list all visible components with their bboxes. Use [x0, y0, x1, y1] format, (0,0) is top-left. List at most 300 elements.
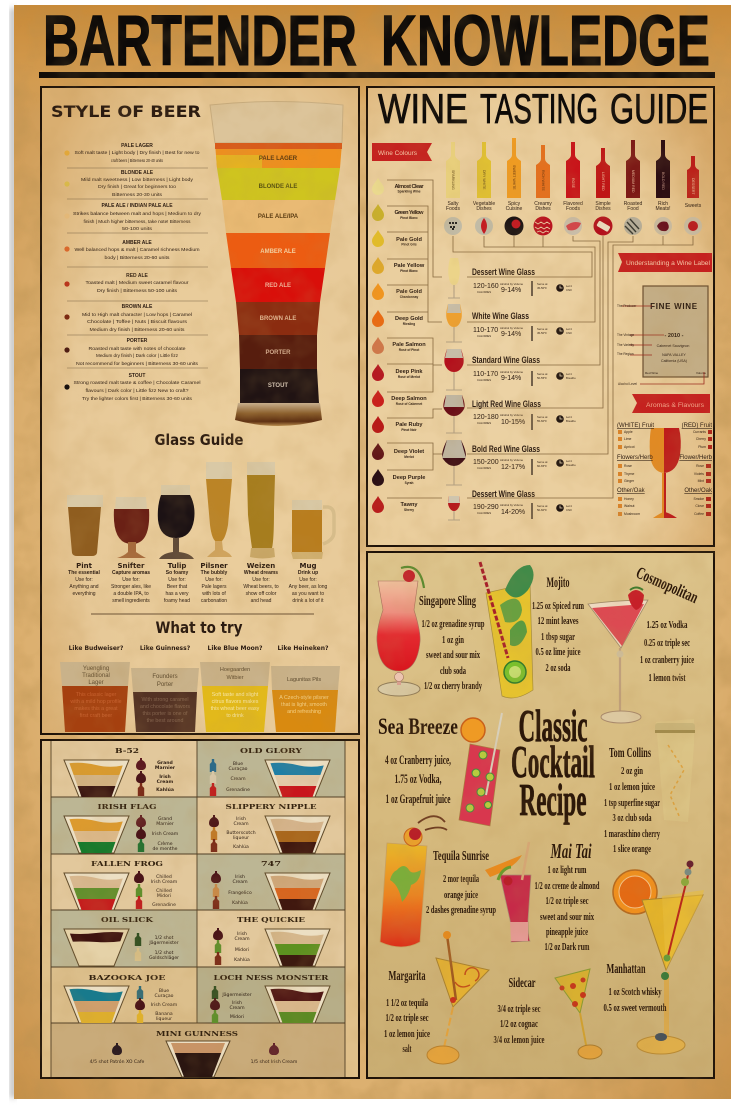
beer recommendation cups: Yuengling: [83, 666, 109, 672]
wine colour labels: Deep Gold: [395, 316, 424, 322]
glass guide captions: Any beer, as long: [289, 584, 328, 590]
wine label diagram: Cabernet Sauvignon: [657, 344, 689, 348]
glass specifications: Standard Wine Glass: [472, 355, 540, 365]
food pairing labels: Flavored: [563, 201, 583, 207]
glass specifications: Serve at: [537, 504, 548, 508]
shot: Irish Flag: Grand: [158, 816, 172, 822]
beer glass layer chart: RED ALE: [265, 283, 291, 289]
glass specifications: 12-17%: [501, 464, 525, 471]
what to try questions: Like Blue Moon?: [208, 645, 263, 652]
recipe: tom collins: 1 slice orange: [613, 843, 651, 855]
beer recommendation cups: first craft beer: [80, 713, 112, 719]
shot: Bazooka Joe: Irish Cream: [151, 1002, 178, 1008]
wine label diagram: - 2010 -: [665, 333, 684, 339]
recipe: mai tai: pineapple juice: [546, 926, 588, 938]
aroma lists: Mint: [698, 479, 704, 483]
glass guide captions: smell ingredients: [112, 598, 150, 604]
food pairing labels: Food: [627, 206, 639, 212]
glass specifications: Serve at: [537, 327, 548, 331]
food pairing labels: Spicy: [508, 201, 521, 207]
glass guide captions: Pint: [76, 562, 93, 570]
aroma lists: Lime: [624, 437, 631, 441]
glass specifications: Alcohol by Volume: [500, 458, 523, 462]
wine bottles: MEDIUM RED: [631, 170, 635, 193]
glass guide captions: The bubbly: [201, 570, 228, 576]
shot: Slippery Nipple: Kahlúa: [233, 843, 249, 850]
wine label diagram: FINE WINE: [650, 302, 698, 311]
beer style descriptions: AMBER ALE: [122, 240, 152, 246]
beer recommendation cups: with a mild hop profile: [70, 699, 122, 705]
aroma lists: Smoke: [693, 497, 704, 501]
food pairing labels: Simple: [595, 201, 611, 207]
connector lines: [387, 180, 693, 498]
glass specifications: Serve at: [537, 372, 548, 376]
food pairing labels: Creamy: [534, 201, 552, 207]
aroma lists: Thyme: [624, 472, 634, 476]
ribbon: wine colours: Wine Colours: [378, 150, 418, 157]
wine colour labels: Deep Violet: [394, 449, 424, 455]
heading: wine tasting guide: [378, 85, 708, 132]
glass specifications: 150-200: [473, 459, 499, 466]
beer style descriptions: Medium dry finish | Bitterness 20-60 units: [90, 327, 185, 333]
shot: B-52: Marnier: [155, 765, 176, 771]
shot: Loch Ness Monster: Jägermeister: [221, 992, 252, 998]
food pairing labels: Dishes: [535, 206, 551, 212]
glass specifications: Chill: [566, 508, 572, 512]
beer recommendation cups: that is light, smooth: [281, 702, 327, 708]
wine colour labels: Green Yellow: [394, 210, 424, 216]
aroma lists: Rose: [696, 464, 704, 468]
glass specifications: Breathe: [566, 419, 576, 423]
food pairing icons: [444, 216, 702, 236]
food pairing labels: [446, 201, 702, 212]
beer style descriptions: RED ALE: [126, 273, 149, 279]
shot: Oil Slick: Goldschläger: [149, 955, 179, 961]
wine label diagram: Red Wine: [645, 371, 659, 375]
wine colour labels: Pale Salmon: [392, 342, 426, 348]
glass specifications: Serve at: [537, 460, 548, 464]
what to try questions: Like Budweiser?: [69, 645, 124, 652]
shot: The Quickie: Cream: [234, 936, 250, 942]
beer style descriptions: Medium dry finish | Dark color | Little fizz: [96, 353, 179, 359]
illustration: singapore sling: [377, 567, 424, 696]
shot: B-52: Irish: [159, 774, 171, 780]
recipe: manhattan: [604, 962, 666, 1014]
recipe: sea breeze: [378, 714, 458, 806]
panel: style of beer and glass guide: [41, 87, 359, 734]
shot: Bazooka Joe: Banana: [155, 1011, 173, 1017]
wine glasses: [442, 258, 466, 520]
recipe: margarita: 1 1/2 oz tequila: [386, 997, 428, 1009]
glass guide captions: Anything and: [69, 584, 99, 590]
food pairing labels: Roasted: [624, 201, 643, 207]
shot: The Quickie: Kahlúa: [234, 956, 250, 963]
wine colour labels: Pinot Noir: [401, 428, 417, 432]
beer colour dots: [64, 150, 70, 390]
aroma lists: Honey: [624, 497, 634, 501]
illustration: umbrella drink: [485, 842, 531, 942]
recipe: manhattan: Manhattan: [606, 962, 646, 977]
wine bottles: DRY WHITE: [482, 170, 486, 190]
shot: The Quickie: [213, 916, 330, 966]
aroma lists: Rose: [624, 464, 632, 468]
wine label diagram: NAPA VALLEY: [662, 353, 686, 357]
recipe: singapore sling: 1 oz gin: [442, 634, 464, 646]
aroma lists: Violets: [694, 472, 704, 476]
recipe: cosmopolitan: 1 lemon twist: [648, 672, 686, 684]
recipe: cosmopolitan: 1 oz cranberry juice: [640, 654, 694, 666]
beer style descriptions: body | Bitterness 20-60 units: [104, 255, 170, 261]
beer recommendation cups: With strong caramel: [141, 697, 189, 703]
shot: Fallen Frog: Midori: [157, 893, 171, 899]
beer style descriptions: Mid to High malt character | Low hops | Caramel: [82, 312, 192, 318]
shot: B-52: B-52: [115, 747, 139, 755]
glass guide captions: Pale lagers: [201, 584, 227, 590]
illustration: sidecar: [555, 969, 602, 1059]
heading: wine tasting guide: TASTING: [480, 85, 598, 132]
recipe: sidecar: 3/4 oz lemon juice: [494, 1034, 545, 1046]
glass specifications: [472, 267, 576, 519]
aroma lists: Flower/Herb: [679, 455, 713, 461]
wine bottles: BOLD RED: [661, 172, 665, 190]
shot: Loch Ness Monster: Midori: [230, 1014, 244, 1020]
heading: classic cocktail recipe: [511, 700, 595, 825]
beer recommendation cups: Soft taste and slight: [212, 692, 259, 698]
what to try questions: [69, 645, 329, 652]
glass specifications: 45-50°F: [537, 331, 547, 335]
shot: 747: Irish: [235, 874, 245, 880]
recipe: mai tai: 1/2 oz Dark rum: [544, 941, 590, 953]
recipe: mai tai: sweet and sour mix: [540, 911, 594, 923]
ribbon: understanding a wine label: Understanding a Wine Label: [626, 260, 710, 267]
recipe: tom collins: [604, 746, 660, 855]
glass specifications: Breathe: [566, 376, 576, 380]
wine colour labels: Pale Gold: [396, 237, 422, 243]
beer style descriptions: STOUT: [129, 373, 145, 379]
wine bottles: DESSERT: [691, 178, 695, 195]
shot: Slippery Nipple: [209, 803, 330, 853]
glass guide captions: Mug: [300, 562, 316, 570]
wine colour labels: Sherry: [404, 508, 414, 512]
shot: Old Glory: Cream: [230, 776, 246, 782]
glass guide captions: Pilsner: [200, 562, 228, 570]
shot: Old Glory: Blue: [233, 761, 243, 767]
shot: B-52: Cream: [157, 779, 174, 785]
shot: Loch Ness Monster: LOCH NESS MONSTER: [214, 974, 329, 982]
aroma lists: Flowers/Herb: [617, 455, 653, 461]
aroma lists: Walnut: [624, 504, 634, 508]
glass specifications: Light Red Wine Glass: [472, 399, 541, 409]
ribbon: understanding a wine label: [618, 253, 712, 272]
wine bottles: SPARKLING: [451, 170, 455, 190]
beer style descriptions: Dry finish | Bitterness 50-100 units: [97, 288, 178, 294]
title: [43, 2, 710, 81]
glass specifications: Let it: [566, 284, 572, 288]
recipe: margarita: 1 oz lemon juice: [384, 1028, 430, 1040]
beer style descriptions: Mild malt sweetness | Low bitterness | Light body: [81, 177, 194, 183]
beer recommendation cups: Lager: [88, 680, 104, 686]
heading: classic cocktail recipe: Cocktail: [511, 736, 595, 787]
shot: Old Glory: Curaçao: [229, 766, 248, 772]
shot: Loch Ness Monster: Cream: [229, 1005, 245, 1011]
recipe: mai tai: 1/2 oz creme de almond: [534, 880, 600, 892]
shot: Bazooka Joe: [64, 974, 178, 1023]
recipe: sidecar: 1/2 oz cognac: [500, 1018, 538, 1030]
glass guide captions: show off color: [246, 591, 277, 597]
recipe: sidecar: 3/4 oz triple sec: [498, 1003, 541, 1015]
glass specifications: 9-14%: [501, 331, 521, 338]
shot: The Quickie: Irish: [237, 931, 247, 937]
wine label diagram: Volume: [696, 371, 706, 375]
wine bottles: [446, 138, 699, 198]
glass specifications: Chill: [566, 288, 572, 292]
shot: Mini Guinness: 4/5 shot Patrón XO Cafe: [90, 1058, 145, 1065]
glass guide captions: Stronger ales, like: [111, 584, 151, 590]
glass specifications: Let it: [566, 415, 572, 419]
glass specifications: 10-15%: [501, 419, 525, 426]
glass guide captions: Weizen: [247, 562, 275, 570]
glass specifications: Let it: [566, 504, 572, 508]
shot: Fallen Frog: FALLEN FROG: [91, 860, 164, 868]
recipe: sea breeze: 1 oz Grapefruit juice: [386, 791, 451, 806]
wine label diagram: The Varietty: [617, 343, 634, 347]
recipe: mojito: 12 mint leaves: [538, 615, 579, 627]
heading: style of beer: STYLE OF BEER: [51, 102, 201, 121]
recipe: tom collins: 3 oz club soda: [612, 812, 652, 824]
shot: Oil Slick: [64, 916, 179, 966]
recipe: sea breeze: Sea Breeze: [378, 714, 458, 739]
aroma lists: Coffee: [694, 512, 704, 516]
shot: The Quickie: THE QUICKIE: [237, 916, 305, 924]
aroma lists: Ginger: [624, 479, 635, 483]
beer style descriptions: Bitterness 20-30 units: [112, 192, 163, 198]
shot: Oil Slick: 1/2 shot: [155, 935, 174, 941]
glass guide captions: Tulip: [168, 562, 186, 570]
recipe: cosmopolitan: Cosmopolitan: [633, 563, 702, 607]
beer style descriptions: Toasted malt | Medium sweet caramel flavour: [86, 280, 189, 286]
wine label diagram: California (USA): [661, 359, 687, 363]
wine colour labels: Deep Salmon: [391, 396, 427, 402]
ribbon: wine colours: [372, 143, 432, 161]
heading: glass guide: Glass Guide: [154, 431, 244, 449]
shot: Oil Slick: OIL SLICK: [101, 916, 153, 924]
beer recommendation cups: and chocolate flavors: [140, 704, 190, 710]
glass guide captions: with lots of: [202, 591, 226, 597]
wine colour labels: [391, 184, 427, 512]
food pairing labels: Foods: [446, 206, 460, 212]
aroma lists: Apricot: [624, 445, 635, 449]
shot: Fallen Frog: Chilled: [156, 874, 172, 880]
shot: Mini Guinness: MINI GUINNESS: [156, 1030, 238, 1038]
shot: Slippery Nipple: SLIPPERY NIPPLE: [226, 803, 317, 811]
recipe: tom collins: 1 maraschino cherry: [604, 828, 660, 840]
wine label diagram: The Region: [617, 352, 634, 356]
beer recommendation cups: citrus flavors makes: [212, 699, 259, 705]
recipe: sidecar: Sidecar: [508, 976, 536, 991]
shot: Old Glory: Grenadine: [226, 787, 250, 793]
glass specifications: 110-170: [473, 327, 498, 334]
shot: The Quickie: Midori: [235, 947, 249, 953]
recipe: sea breeze: 4 oz Cranberry juice,: [385, 752, 451, 767]
beer style descriptions: Dry finish | Great for beginners too: [98, 184, 176, 190]
beer style descriptions: PORTER: [127, 338, 148, 344]
recipe: tequila sunrise: 2 mor tequila: [443, 873, 479, 885]
wine colour labels: Rosé of Pinot: [399, 348, 420, 352]
beer style descriptions: Strong roasted malt taste & coffee | Chocolate Caramel: [74, 380, 200, 386]
glass guide captions: Capture aromas: [112, 570, 150, 576]
title rule: [39, 72, 715, 78]
aroma lists: [617, 423, 713, 516]
shot: Fallen Frog: Chilled: [156, 888, 172, 894]
beer style descriptions: Strikes balance between malt and hops | Medium to dry: [73, 211, 202, 217]
wine label diagram: The Producer: [617, 304, 637, 308]
shot: Irish Flag: Marnier: [156, 821, 174, 827]
wine colour labels: Rosé of Merlot: [398, 375, 421, 379]
shot: Old Glory: [210, 747, 330, 797]
glass guide captions: a double IPA, to: [113, 591, 149, 597]
recipe: tequila sunrise: 2 dashes grenadine syrup: [426, 904, 496, 916]
aroma lists: Cherry: [696, 437, 706, 441]
aroma lists: (WHITE) Fruit: [617, 423, 654, 429]
wine colour labels: Pale Gold: [396, 289, 422, 295]
glass specifications: 120-160: [473, 283, 499, 290]
food pairing labels: Meats!: [655, 206, 671, 212]
recipe: margarita: Margarita: [388, 969, 426, 984]
beer recommendation cups: A Czech-style pilsner: [279, 695, 329, 701]
glass specifications: CALORIES: [477, 511, 491, 515]
ribbon: aromas and flavours: [632, 394, 710, 413]
recipe: tom collins: Tom Collins: [609, 746, 651, 761]
shot: Fallen Frog: Irish Cream: [151, 879, 178, 885]
glass specifications: Alcohol by Volume: [500, 282, 523, 286]
recipe: tequila sunrise: [426, 849, 496, 916]
glass specifications: CALORIES: [477, 378, 491, 382]
recipe: cosmopolitan: 0.25 oz triple sec: [644, 637, 690, 649]
wine bottles: RICH WHITE: [541, 170, 545, 191]
wine colour labels: Deep Purple: [393, 475, 425, 481]
shot: 747: 747: [261, 860, 281, 868]
glass specifications: 120-180: [473, 414, 499, 421]
glass specifications: Bold Red Wine Glass: [472, 444, 540, 454]
glass guide captions: drink a lot of it: [292, 598, 324, 604]
shot: Slippery Nipple: liqueur: [233, 835, 249, 841]
beer style descriptions: BROWN ALE: [122, 304, 153, 310]
shot: Bazooka Joe: Blue: [159, 988, 169, 994]
glass specifications: 55-60°F: [537, 419, 547, 423]
beer style descriptions: 50-100 units: [122, 226, 153, 232]
recipe: mai tai: [534, 839, 600, 953]
wine colour drops: [372, 178, 384, 513]
wine colour labels: Pinot Blanc: [400, 269, 418, 273]
glass specifications: 50-60°F: [537, 508, 547, 512]
beer recommendation cups: this wheat beer easy: [211, 706, 260, 712]
what to try questions: Like Heineken?: [277, 645, 329, 652]
glass guide captions: Use for:: [75, 577, 93, 583]
shot: B-52: Kahlúa: [156, 786, 174, 793]
glass specifications: Dessert Wine Glass: [472, 489, 535, 499]
illustration: mojito: [480, 562, 534, 698]
wine colour labels: Tawny: [400, 502, 418, 508]
aroma lists: Currants: [693, 430, 706, 434]
food pairing labels: Cuisine: [506, 206, 523, 212]
beer glass layer chart: BLONDE ALE: [259, 184, 297, 190]
wine colour labels: Chardonnay: [400, 295, 419, 299]
wine bottles: LIGHT RED: [601, 172, 605, 191]
food pairing labels: Dishes: [595, 206, 611, 212]
illustration: sea breeze: [459, 713, 502, 826]
glass guide captions: and head: [251, 598, 272, 604]
shot: Slippery Nipple: Irish: [236, 816, 246, 822]
shot: Loch Ness Monster: [210, 974, 330, 1023]
wine label diagram: [617, 286, 708, 386]
shot: Mini Guinness: 1/5 shot Irish Cream: [251, 1059, 298, 1065]
beer style descriptions: BLONDE ALE: [121, 170, 154, 176]
recipe: mojito: 1.25 oz Spiced rum: [532, 600, 584, 612]
wine colour labels: Syrah: [405, 481, 413, 485]
shot: Fallen Frog: Grenadine: [152, 902, 176, 908]
beer style descriptions: Roasted malt taste with notes of chocolate: [88, 346, 186, 352]
glass guide captions: Wheat dreams: [244, 570, 278, 576]
beer style descriptions: Soft malt taste | Light body | Dry finish | Best for new to: [74, 150, 200, 156]
beer style descriptions: PALE ALE / INDIAN PALE ALE: [101, 203, 173, 209]
glass guide captions: foamy head: [164, 598, 190, 604]
glass specifications: Alcohol by Volume: [500, 413, 523, 417]
beer recommendation cups: and refreshing: [287, 709, 321, 715]
illustration: tom collins: [655, 719, 695, 822]
wine colour labels: Pinot Gris: [401, 242, 417, 246]
beer recommendation cups: Hoegaarden: [220, 667, 250, 673]
aroma lists: Other/Oak: [617, 488, 646, 494]
food pairing labels: Salty: [447, 201, 459, 207]
aroma lists: Plum: [698, 445, 706, 449]
glass specifications: 45-50°F: [537, 286, 547, 290]
beer recommendation cups: Traditional: [82, 673, 110, 679]
recipe: sea breeze: 1.75 oz Vodka,: [394, 771, 442, 786]
wine colour labels: Almost Clear: [394, 184, 424, 190]
shot: 747: [211, 860, 330, 910]
shot: Bazooka Joe: liqueur: [156, 1016, 172, 1022]
recipe: tom collins: 1 oz lemon juice: [609, 781, 655, 793]
aroma lists: Apple: [624, 430, 633, 434]
beer recommendation cups: the best around: [147, 718, 183, 724]
illustration: cosmopolitan: [588, 588, 648, 723]
glass specifications: 60-65°F: [537, 464, 547, 468]
glass specifications: Alcohol by Volume: [500, 326, 523, 330]
recipe: margarita: [384, 969, 430, 1055]
recipe: manhattan: 1 oz Scotch whisky: [608, 986, 662, 998]
glass guide captions: The essential: [68, 570, 100, 576]
glass specifications: Let it: [566, 372, 572, 376]
wine bottles: SWEET WHITE: [512, 165, 516, 190]
glass guide captions: So foamy: [166, 570, 188, 576]
glass specifications: CALORIES: [477, 334, 491, 338]
beer style descriptions: craft beers | Bitterness 20-40 units: [111, 158, 163, 164]
wine bottles: ROSÉ: [571, 178, 576, 189]
shot: Mini Guinness: [90, 1030, 298, 1078]
glass guide captions: Use for:: [205, 577, 223, 583]
heading: classic cocktail recipe: Classic: [518, 700, 588, 751]
shot: Old Glory: OLD GLORY: [240, 747, 302, 755]
shot: Irish Flag: Irish Cream: [152, 831, 179, 837]
shot: 747: Cream: [232, 879, 248, 885]
beer recommendation cups: Porter: [157, 682, 173, 688]
shot: 747: Frangelico: [228, 890, 252, 896]
panel: classic cocktail recipe: [367, 552, 714, 1078]
wine colour labels: Pinot Blanc: [400, 216, 418, 220]
beer recommendation cups: Witbier: [226, 675, 244, 681]
beer recommendation cups: this porter is one of: [142, 711, 188, 717]
illustration: manhattan: [613, 860, 704, 1054]
